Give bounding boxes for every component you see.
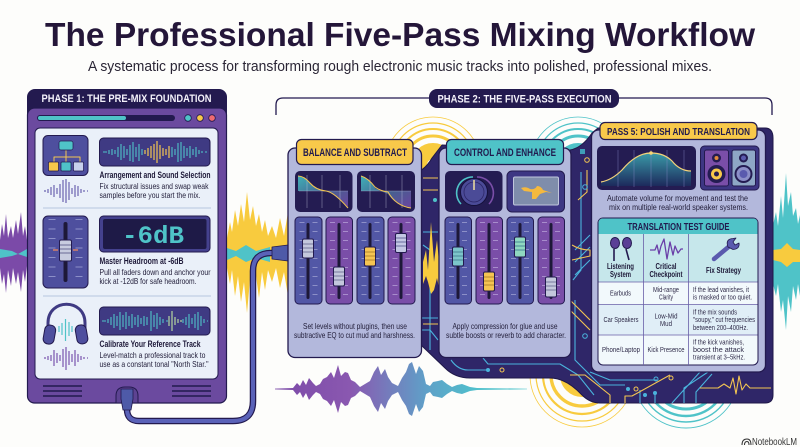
port	[116, 387, 138, 403]
row: earbuds: If the lead vanishes, it	[693, 285, 750, 294]
small waveform 1	[44, 179, 88, 203]
vents	[43, 386, 211, 396]
waveform in gap	[423, 222, 439, 294]
waveform display 3	[100, 307, 210, 335]
text: calibrate: use as a constant tonal "North Star."	[100, 359, 208, 369]
row: earbuds: Mid-range	[653, 285, 679, 294]
row: phone/laptop: transient at 3–5kHz.	[693, 352, 745, 362]
fader 3	[357, 217, 384, 304]
label	[600, 122, 757, 140]
text: master headroom: Pull all faders down and anchor your	[100, 267, 211, 277]
row: earbuds: is masked or too quiet.	[693, 292, 752, 302]
fader 3	[507, 217, 534, 304]
icon: waveform	[650, 239, 683, 259]
background arcs: teal top	[530, 117, 626, 213]
row: car speakers	[604, 308, 755, 332]
label: BALANCE AND SUBTRACT	[303, 147, 407, 159]
display: -6dB: -6dB	[122, 222, 184, 251]
window dots	[185, 115, 215, 121]
text: master headroom	[100, 256, 211, 286]
column headers: Fix Strategy	[706, 265, 741, 275]
description	[294, 321, 415, 340]
row: phone/laptop	[602, 338, 745, 362]
text: calibrate: Level-match a professional track to	[100, 350, 206, 360]
background waveform: bottom centre	[275, 362, 527, 416]
panel: pass 5 polish and translation	[592, 122, 766, 372]
label: CONTROL AND ENHANCE	[454, 147, 556, 159]
column headers: Checkpoint	[650, 269, 683, 279]
description: Apply compression for glue and use	[452, 321, 558, 331]
table header: TRANSLATION TEST GUIDE	[628, 221, 730, 233]
row: car speakers: between 200–400Hz.	[693, 323, 748, 332]
small waveform 3	[44, 347, 88, 370]
icon row	[598, 234, 758, 282]
panel: control and enhance	[439, 140, 571, 358]
fader 4	[388, 217, 415, 304]
icon: hierarchy	[43, 136, 88, 176]
row: car speakers: If the mix sounds	[693, 308, 737, 316]
column headers: System	[610, 269, 631, 279]
speakers	[700, 146, 759, 190]
text: arrangement	[100, 170, 210, 200]
EQ curve 1	[295, 171, 352, 212]
description: mix on multiple real-world speaker systems.	[609, 202, 748, 212]
column headers: Critical	[656, 261, 676, 271]
progress bar	[37, 115, 175, 121]
translation table	[598, 218, 758, 365]
description: Automate volume for movement and test the	[607, 193, 748, 203]
background arcs: yellow top	[385, 117, 481, 213]
phase 2 bracket and label	[276, 89, 772, 115]
circuit board backdrop	[410, 128, 773, 403]
circuit traces: yellow	[423, 170, 771, 403]
description: subtle boosts or reverb to add character.	[446, 330, 566, 340]
fader 1	[445, 217, 472, 304]
display: -6dB	[100, 216, 210, 252]
description: Set levels without plugins, then use	[303, 321, 407, 331]
fader 2	[326, 217, 352, 304]
label	[446, 140, 564, 164]
icon: wrench	[714, 244, 732, 259]
background arcs: teal bottom	[633, 322, 739, 428]
panel: balance and subtract	[288, 140, 422, 358]
divider	[43, 295, 211, 297]
background waveform: yellow between panels	[227, 192, 288, 313]
background arcs: yellow bottom	[530, 323, 634, 427]
row: earbuds	[610, 285, 752, 302]
knob	[445, 171, 502, 212]
phase 2 label: PHASE 2: THE FIVE-PASS EXECUTION	[438, 94, 612, 106]
row tints	[598, 304, 758, 335]
row: phone/laptop: Phone/Laptop	[602, 345, 640, 354]
column headers	[607, 261, 741, 279]
panel: phase 1 device	[27, 89, 227, 403]
label: PASS 5: POLISH AND TRANSLATION	[607, 126, 750, 138]
row: car speakers: "soupy," cut frequencies	[693, 315, 755, 324]
automation curve	[597, 146, 696, 190]
phase 2 label	[429, 89, 619, 108]
circuit traces: teal	[422, 172, 712, 403]
column headers: Listening	[607, 261, 634, 271]
title: The Professional Five-Pass Mixing Workflow	[45, 17, 756, 54]
cable plugs	[121, 245, 288, 410]
row: phone/laptop: Kick Presence	[648, 345, 684, 354]
cable	[121, 245, 288, 421]
fader 4	[538, 217, 564, 304]
text: arrangement: Arrangement and Sound Selection	[100, 170, 210, 180]
text: arrangement: Fix structural issues and swap weak	[100, 181, 209, 191]
content card	[35, 128, 218, 379]
phase 1 header bar	[27, 89, 227, 129]
circuit nodes	[433, 149, 673, 397]
row: earbuds: Clarity	[659, 292, 673, 302]
label	[296, 140, 413, 164]
waveform display 1	[100, 138, 210, 166]
background waveform: far left purple	[0, 212, 27, 293]
table header	[598, 218, 758, 234]
row: phone/laptop: boost the attack	[693, 345, 744, 354]
text: calibrate	[100, 339, 208, 369]
phase 1 header bar: PHASE 1: THE PRE-MIX FOUNDATION	[42, 93, 212, 105]
icon: headphones	[42, 304, 89, 345]
row: car speakers: Car Speakers	[604, 315, 639, 324]
text: calibrate: Calibrate Your Reference Track	[100, 339, 201, 349]
icon: earbuds	[610, 238, 632, 261]
row: earbuds: Earbuds	[610, 288, 631, 298]
row: phone/laptop: If the kick vanishes,	[693, 338, 744, 346]
row: car speakers: Mud	[660, 319, 672, 328]
description: subtractive EQ to cut mud and harshness.	[294, 330, 415, 340]
EQ curve 2	[357, 171, 415, 212]
subtitle: A systematic process for transforming rough electronic music tracks into polished, professional mixes.	[88, 58, 712, 75]
saturation screen	[507, 171, 564, 212]
grid lines	[598, 234, 758, 365]
divider	[43, 207, 211, 209]
icon: fader	[43, 216, 88, 288]
fader 1	[295, 217, 322, 304]
description	[607, 193, 748, 212]
description	[446, 321, 566, 340]
device body	[28, 108, 226, 403]
text: master headroom: Master Headroom at -6dB	[100, 256, 184, 266]
fader 2	[476, 217, 502, 304]
background waveform: far right teal	[773, 173, 800, 330]
text: arrangement: samples before you start the mix.	[100, 190, 200, 200]
icon: wrench head	[727, 238, 739, 250]
row: car speakers: Low-Mid	[654, 312, 678, 320]
text: master headroom: kick at -12dB for safe headroom.	[100, 276, 196, 286]
